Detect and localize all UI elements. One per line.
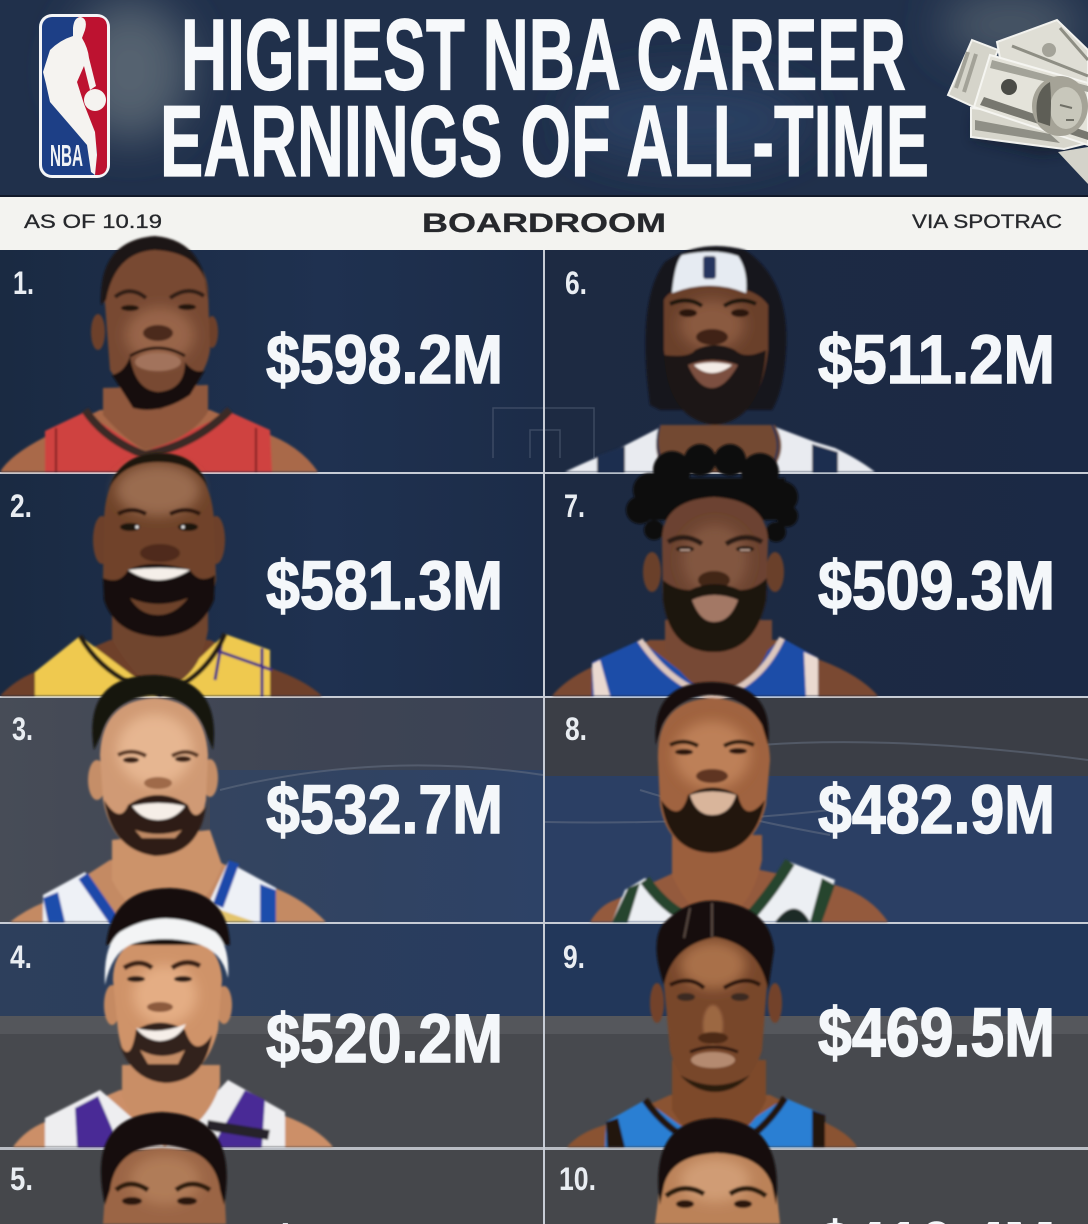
white band [0,195,1088,250]
rank and earnings: 7: $509.3M [818,547,1055,624]
rank and earnings: 6 [565,265,1055,398]
rank and earnings: 9: $469.5M [818,994,1055,1071]
player 2 [0,453,322,696]
rank and earnings: 5 [10,1168,288,1224]
publisher name: BOARDROOM [422,208,666,238]
rank and earnings: 6: 6. [565,265,587,301]
rank and earnings: 4 [10,939,503,1077]
rank and earnings: 7: 7. [564,488,585,524]
player 7 [552,444,878,698]
header background [0,0,1088,196]
rank and earnings: 7 [564,488,1055,624]
rank and earnings: 8 [565,711,1055,848]
rank and earnings: 8: 8. [565,711,587,747]
player 9 [567,901,857,1147]
rank and earnings: 10 [560,1167,1052,1224]
rank and earnings: 2: $581.3M [266,547,503,624]
player 4 [13,888,333,1147]
player 5 [101,1112,227,1224]
rank and earnings: 2: 2. [10,488,32,524]
rank and earnings: 4: $520.2M [266,1000,503,1077]
player 10 [655,1118,780,1224]
date note: AS OF 10.19 [24,212,162,233]
rank and earnings: 8: $482.9M [818,771,1055,848]
rank and earnings: 9 [563,939,1055,1071]
title [160,0,929,198]
NBA logo [39,14,110,178]
rank and earnings: 1: $598.2M [266,321,503,398]
rank and earnings: 3: 3. [12,711,33,747]
player 3 [10,675,326,922]
player 1 [0,236,318,472]
player 6 [565,246,875,472]
row backgrounds [0,250,1088,1224]
icon: dollar bills [948,20,1088,184]
rank and earnings: 1: 1. [13,265,34,301]
rank and earnings: 3: $532.7M [266,771,503,848]
rank and earnings: 1 [13,265,503,398]
rank and earnings: 4: 4. [10,939,32,975]
rank and earnings: 9: 9. [563,939,585,975]
rank and earnings: 3 [12,711,503,848]
player 8 [590,682,888,922]
rank and earnings: 6: $511.2M [818,321,1055,398]
rank and earnings: 2 [10,488,503,624]
source note: VIA SPOTRAC [912,212,1062,233]
NBA logo: NBA [50,138,83,173]
rank and earnings: 5: 5. [10,1161,33,1197]
rank and earnings: 10: 10. [559,1161,596,1197]
